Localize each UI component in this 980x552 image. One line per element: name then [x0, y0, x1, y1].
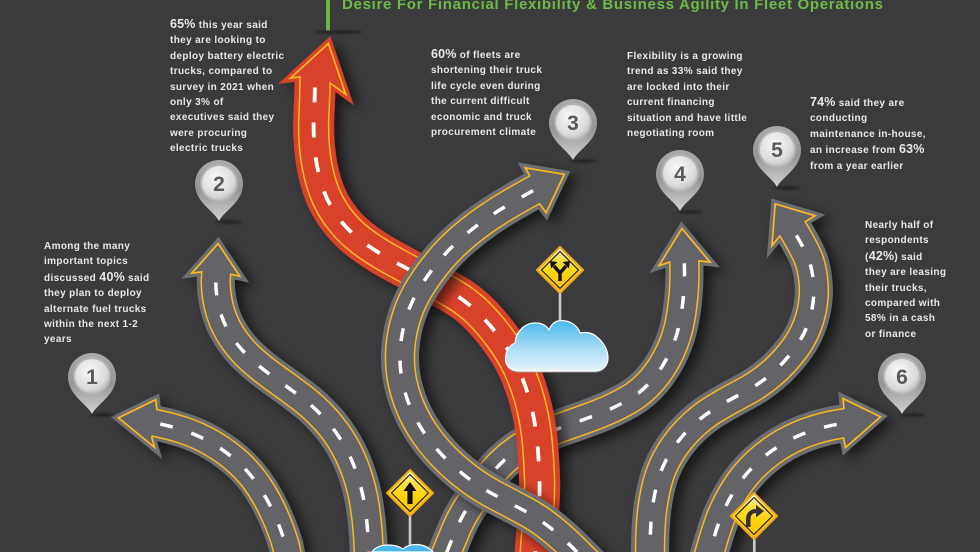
pin 1: 1	[86, 366, 98, 389]
pin 5: 5	[771, 139, 783, 162]
road 2: grey arrow to pin 2	[194, 245, 369, 552]
text block 3: life cycle even during	[431, 81, 541, 92]
text block 2: electric trucks	[170, 143, 243, 154]
pin 1	[68, 353, 116, 416]
text block 4: situation and have little	[627, 113, 747, 124]
text block 6: their trucks,	[865, 283, 927, 294]
text block 5: from a year earlier	[810, 161, 904, 172]
pin 2	[195, 160, 243, 223]
text block 1: within the next 1-2	[44, 319, 138, 330]
road 5: grey arrow to pin 5	[650, 205, 814, 552]
text block 6: compared with	[865, 298, 940, 309]
text block 3	[431, 47, 542, 138]
text block 2: trucks, compared to	[170, 66, 272, 77]
text block 3: procurement climate	[431, 127, 536, 138]
red road: highlighted arrow to the title	[293, 45, 540, 552]
text block 4: trend as 33% said they	[627, 66, 743, 77]
pin 3	[549, 99, 597, 162]
text block 6: 58% in a cash	[865, 313, 935, 324]
pin 3: 3	[567, 112, 579, 135]
text block 5: maintenance in-house,	[810, 129, 926, 140]
bottom cloud with straight-ahead sign	[372, 470, 433, 552]
pin 4: 4	[674, 163, 686, 186]
text block 2: deploy battery electric	[170, 51, 284, 62]
pin 6: 6	[896, 366, 908, 389]
text block 1: they plan to deploy	[44, 288, 142, 299]
text block 4: are locked into their	[627, 82, 730, 93]
text block 3: shortening their truck	[431, 65, 542, 76]
text block 4: current financing	[627, 97, 715, 108]
text block 6: Nearly half of	[865, 220, 933, 231]
text block 4	[627, 51, 747, 139]
text block 1: important topics	[44, 256, 128, 267]
text block 2: only 3% of	[170, 97, 224, 108]
text block 6: they are leasing	[865, 267, 946, 278]
text block 3: economic and truck	[431, 112, 532, 123]
text block 3: the current difficult	[431, 96, 530, 107]
text block 2: were procuring	[170, 128, 247, 139]
road 4: grey arrow to pin 4	[441, 230, 708, 552]
text block 6: respondents	[865, 235, 929, 246]
text block 5: 74% said they are	[810, 95, 905, 109]
icon: right-turn sign	[731, 493, 777, 539]
text block 2	[170, 17, 284, 154]
centre cloud with fork sign	[505, 247, 608, 372]
text block 5	[810, 95, 926, 172]
text block 2: executives said they	[170, 112, 274, 123]
road 1: grey arrow to pin 1	[120, 401, 288, 552]
title accent bar	[314, 0, 362, 33]
text block 5: an increase from 63%	[810, 142, 925, 156]
text block 4: negotiating room	[627, 128, 714, 139]
icon: straight-ahead sign	[387, 470, 433, 516]
right-turn sign	[731, 493, 777, 552]
icon: fork sign	[537, 247, 583, 293]
text block 6	[865, 220, 946, 340]
text block 6: (42%) said	[865, 249, 923, 263]
text block 1: Among the many	[44, 241, 130, 252]
text block 4: Flexibility is a growing	[627, 51, 743, 62]
text block 2: survey in 2021 when	[170, 82, 274, 93]
text block 2: they are looking to	[170, 35, 266, 46]
text block 5: conducting	[810, 113, 867, 124]
text block 2: 65% this year said	[170, 17, 268, 31]
text block 6: or finance	[865, 329, 916, 340]
pin 4	[656, 150, 704, 213]
pin 5	[753, 126, 801, 189]
road 3: grey arrow to pin 3	[400, 169, 592, 552]
pin 6	[878, 353, 926, 416]
pin 2: 2	[213, 173, 225, 196]
text block 1: discussed 40% said	[44, 270, 150, 284]
text block 1	[44, 241, 150, 345]
road 6: grey arrow to pin 6	[707, 400, 879, 552]
text block 3: 60% of fleets are	[431, 47, 521, 61]
text block 1: alternate fuel trucks	[44, 304, 147, 315]
text block 1: years	[44, 334, 72, 345]
